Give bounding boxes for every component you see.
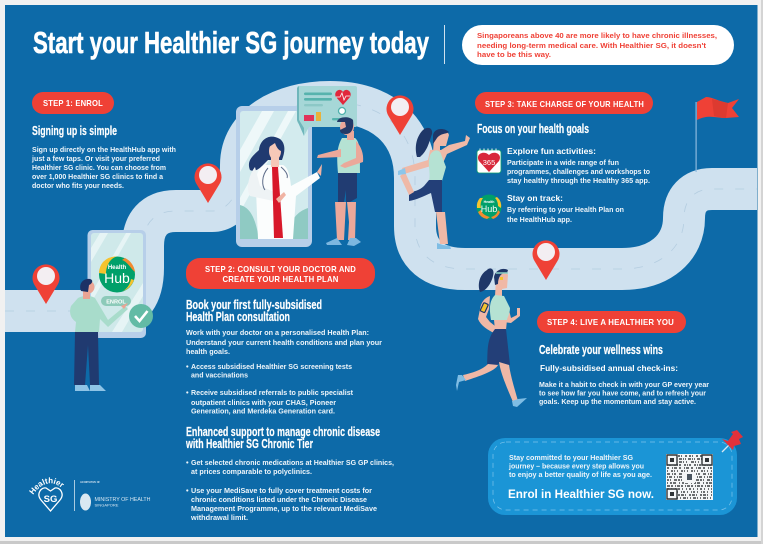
Ministry of Health logo: SINGAPORE	[94, 504, 119, 508]
step 2 text block: Management Programme, up to the relevant MediSave	[191, 504, 377, 513]
map pin 2	[386, 95, 414, 135]
icon: push pin	[722, 430, 743, 452]
step 2 text block: Enhanced support to manage chronic disease	[186, 425, 380, 439]
intro callout	[462, 25, 734, 65]
step 2 text block	[185, 298, 394, 522]
step 4 text block: to see how far you have come, and to refresh your	[539, 388, 706, 398]
intro callout: needing long-term medical care. With Healthier SG, it doesn't	[477, 41, 706, 50]
step 2 badge: CREATE YOUR HEALTH PLAN	[222, 274, 338, 284]
Ministry of Health logo: AN INITIATIVE OF	[80, 481, 101, 484]
step 2 text block: with Healthier SG Chronic Tier	[185, 437, 313, 451]
step 3 heading: Focus on your health goals	[477, 122, 589, 136]
icon: heart	[335, 90, 351, 105]
step 1 text block	[31, 92, 176, 190]
step 4 text block: Celebrate your wellness wins	[539, 343, 663, 357]
step 4 badge: STEP 4: LIVE A HEALTHIER YOU	[547, 317, 674, 327]
step 1 text block: over 1,000 Healthier SG clinics to find a	[32, 172, 164, 181]
HealthHub logo	[99, 256, 135, 292]
icon: Healthy 365 calendar: 365	[483, 158, 495, 167]
Healthier SG logo: SG	[44, 494, 57, 505]
step 2 text block: Get selected chronic medications at Healthier SG GP clinics,	[191, 458, 394, 467]
step 4 text block: Fully-subsidised annual check-ins:	[540, 363, 678, 373]
icon: HealthHub: Hub	[481, 204, 497, 214]
phone: HealthHub enrol	[88, 230, 153, 338]
explore fun activities: programmes, challenges and workshops to	[507, 167, 650, 176]
icon: HealthHub: Health	[484, 200, 494, 204]
step 2 text block: Work with your doctor on a personalised Health Plan:	[186, 328, 369, 337]
icon: HealthHub	[476, 194, 502, 220]
step 2 text block: Use your MediSave to fully cover treatment costs for	[191, 486, 372, 495]
intro callout: have to be this way.	[477, 50, 551, 59]
icon: Healthy 365 calendar	[477, 148, 501, 173]
step 1 text block: Sign up directly on the HealthHub app with	[32, 145, 176, 154]
step 2 text block: withdrawal limit.	[190, 513, 248, 522]
step 3 badge	[475, 92, 653, 114]
step 2 text block: Receive subsidised referrals to public specialist	[191, 388, 354, 397]
Ministry of Health logo: MINISTRY OF HEALTH	[94, 497, 151, 503]
enrol call-to-action card: Stay committed to your Healthier SG	[509, 453, 633, 462]
explore fun activities: stay healthy through the Healthy 365 app.	[507, 176, 650, 185]
enrol call-to-action card: Enrol in Healthier SG now.	[508, 487, 654, 501]
step 1 badge: STEP 1: ENROL	[43, 98, 103, 108]
step 2 text block: Health Plan consultation	[186, 310, 290, 324]
stay on track	[507, 193, 624, 224]
stay on track: Stay on track:	[507, 193, 563, 203]
QR code	[666, 454, 713, 500]
step 1 text block: doctor who fits your needs.	[32, 181, 124, 190]
step 2 text block: Understand your current health conditions and plan your	[186, 338, 382, 347]
enrol call-to-action card	[488, 430, 743, 515]
stretching woman	[398, 128, 470, 249]
step 2 text block: chronic conditions listed under the Chronic Disease	[191, 495, 367, 504]
step 2 text block: health goals.	[186, 347, 230, 356]
step 2 text block: •	[186, 362, 189, 371]
phone: doctor consultation	[236, 106, 322, 247]
winding road	[5, 102, 757, 311]
explore fun activities: Explore fun activities:	[507, 146, 596, 156]
step 2 text block: Generation, and Merdeka Generation card.	[191, 406, 335, 416]
step 2 text block: •	[186, 486, 189, 495]
HealthHub logo: Health	[108, 265, 126, 271]
step 1 text block: Healthier SG clinic. You can choose from	[32, 163, 166, 172]
step 2 badge: STEP 2: CONSULT YOUR DOCTOR AND	[205, 264, 356, 274]
Healthier SG logo: Healthier	[29, 477, 64, 494]
step 2 text block: •	[186, 388, 189, 397]
patient man	[317, 117, 363, 246]
stay on track: By referring to your Health Plan on	[507, 205, 624, 214]
step 2 text block: Book your first fully-subsidised	[186, 298, 322, 312]
step 1 text block: just a few taps. Or visit your preferred	[31, 154, 160, 163]
stay on track: the HealthHub app.	[507, 215, 572, 224]
step 2 text block: outpatient clinics with your CHAS, Pioneer	[191, 398, 336, 407]
enrol call-to-action card: to enjoy a better quality of life as you age.	[509, 470, 652, 479]
step 3 badge: STEP 3: TAKE CHARGE OF YOUR HEALTH	[485, 99, 644, 109]
running woman	[456, 268, 527, 407]
step 2 text block: Access subsidised Healthier SG screening tests	[191, 362, 352, 371]
step 2 badge	[186, 258, 375, 289]
map pin 1	[195, 163, 222, 203]
step 1 badge	[32, 92, 114, 114]
enrol call-to-action card: journey – because every step allows you	[508, 462, 644, 470]
enrol button: ENROL	[106, 300, 126, 306]
step 2 text block: at prices comparable to polyclinics.	[191, 467, 312, 476]
step 1 text block: Signing up is simple	[32, 124, 117, 138]
title: Start your Healthier SG journey today	[33, 25, 430, 60]
Healthier SG logo	[29, 477, 64, 512]
man using phone	[70, 279, 128, 391]
health plan speech bubble	[297, 86, 357, 136]
explore fun activities: Participate in a wide range of fun	[507, 158, 619, 167]
intro callout: Singaporeans above 40 are more likely to have chronic illnesses,	[477, 31, 717, 40]
check mark	[129, 304, 153, 328]
map pin 3	[532, 240, 560, 280]
finish flag	[696, 97, 739, 172]
step 4 text block: Make it a habit to check in with your GP every year	[539, 380, 709, 389]
doctor figure	[248, 137, 322, 239]
Ministry of Health logo	[80, 481, 151, 510]
step 2 text block: •	[186, 458, 189, 467]
step 4 text block	[539, 343, 709, 406]
step 2 text block: and vaccinations	[191, 370, 248, 380]
step 4 text block: goals. Keep up the momentum and stay active.	[539, 397, 696, 406]
map pin 4	[32, 264, 60, 304]
step 4 badge	[537, 311, 686, 333]
HealthHub logo: Hub	[104, 270, 130, 286]
explore fun activities	[507, 146, 650, 185]
